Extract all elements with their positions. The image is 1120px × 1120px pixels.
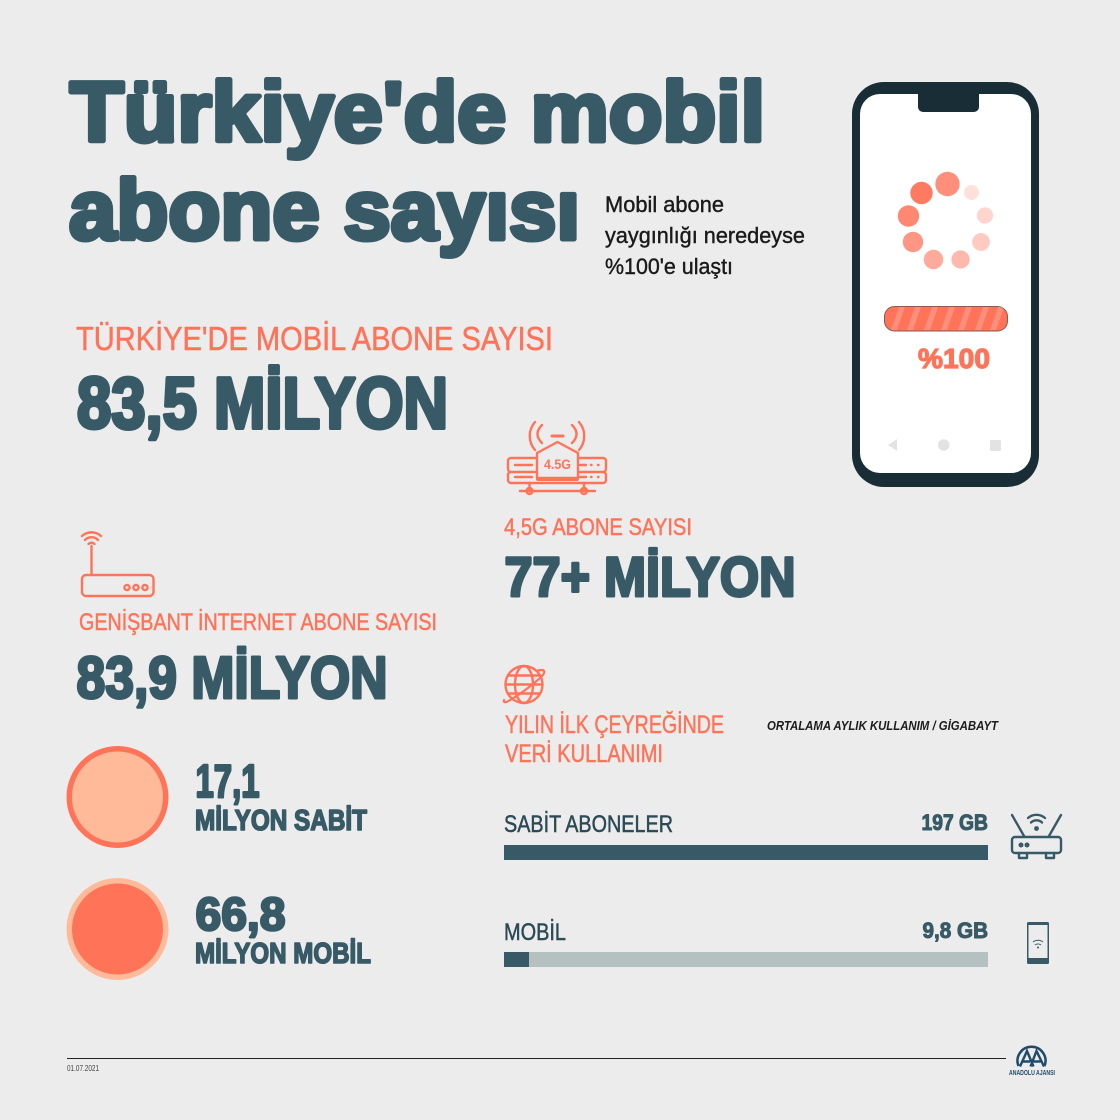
- bar chart: mobile usage: 9,8 GB: [922, 918, 988, 943]
- bar chart: mobile usage: [504, 918, 988, 967]
- icon: broadband modem: [82, 532, 154, 596]
- stat: broadband subscribers: 83,9 MİLYON: [76, 645, 388, 711]
- stat: mobile split: MİLYON MOBİL: [195, 938, 371, 970]
- bar chart: fixed subscribers usage: SABİT ABONELER: [504, 811, 673, 838]
- title: abone sayısı: [69, 163, 580, 257]
- title: [69, 65, 765, 257]
- loading spinner: [898, 172, 993, 269]
- icon: globe: [504, 666, 544, 703]
- percent label: %100: [918, 343, 990, 374]
- stat: mobile split: [195, 888, 371, 970]
- footer line: [67, 1058, 1006, 1059]
- stat: mobile subscribers: 83,5 MİLYON: [77, 364, 448, 444]
- logo: Anadolu Ajansı: ANADOLU AJANSI: [1009, 1070, 1055, 1077]
- subtitle text: [605, 192, 805, 279]
- phone notch: [918, 92, 979, 112]
- stat: broadband subscribers: GENİŞBANT İNTERNET ABONE SAYISI: [79, 609, 437, 636]
- circle: mobile subscribers: [66, 878, 168, 980]
- progress bar: [884, 306, 1008, 331]
- stat: mobile subscribers: [76, 320, 553, 444]
- subtitle text: %100'e ulaştı: [605, 254, 733, 279]
- stat: broadband subscribers: [76, 609, 437, 711]
- stat: mobile subscribers: TÜRKİYE'DE MOBİL ABONE SAYISI: [76, 320, 553, 357]
- subtitle text: yaygınlığı neredeyse: [605, 223, 805, 248]
- icon: wifi router: [1012, 815, 1061, 858]
- stat: fixed subscribers: [195, 755, 367, 837]
- title: Türkiye'de mobil: [70, 65, 765, 159]
- icon: 4.5G tower: [508, 422, 606, 494]
- phone navigation buttons: [888, 439, 1001, 451]
- heading: data usage: YILIN İLK ÇEYREĞİNDE: [505, 710, 724, 739]
- date: 01.07.2021: [67, 1064, 99, 1073]
- bar chart: mobile usage: MOBİL: [504, 919, 566, 946]
- bar chart: fixed subscribers usage: [504, 810, 988, 860]
- phone illustration: [852, 82, 1039, 487]
- logo: Anadolu Ajansı: [1009, 1047, 1055, 1077]
- subtitle text: Mobil abone: [605, 192, 724, 217]
- heading: data usage: VERİ KULLANIMI: [505, 739, 663, 768]
- stat: fixed subscribers: MİLYON SABİT: [195, 805, 367, 837]
- icon: 4.5G tower: 4.5G: [544, 456, 571, 472]
- stat: mobile split: 66,8: [196, 888, 286, 940]
- stat: 4.5G subscribers: [504, 514, 796, 608]
- circle: fixed subscribers: [66, 746, 168, 848]
- unit note: ORTALAMA AYLIK KULLANIM / GİGABAYT: [767, 718, 999, 733]
- stat: fixed subscribers: 17,1: [196, 755, 260, 807]
- stat: 4.5G subscribers: 4,5G ABONE SAYISI: [504, 514, 692, 541]
- icon: mobile wifi: [1027, 922, 1049, 964]
- stat: 4.5G subscribers: 77+ MİLYON: [504, 545, 796, 608]
- heading: data usage: [505, 710, 724, 768]
- bar chart: fixed subscribers usage: 197 GB: [922, 810, 988, 835]
